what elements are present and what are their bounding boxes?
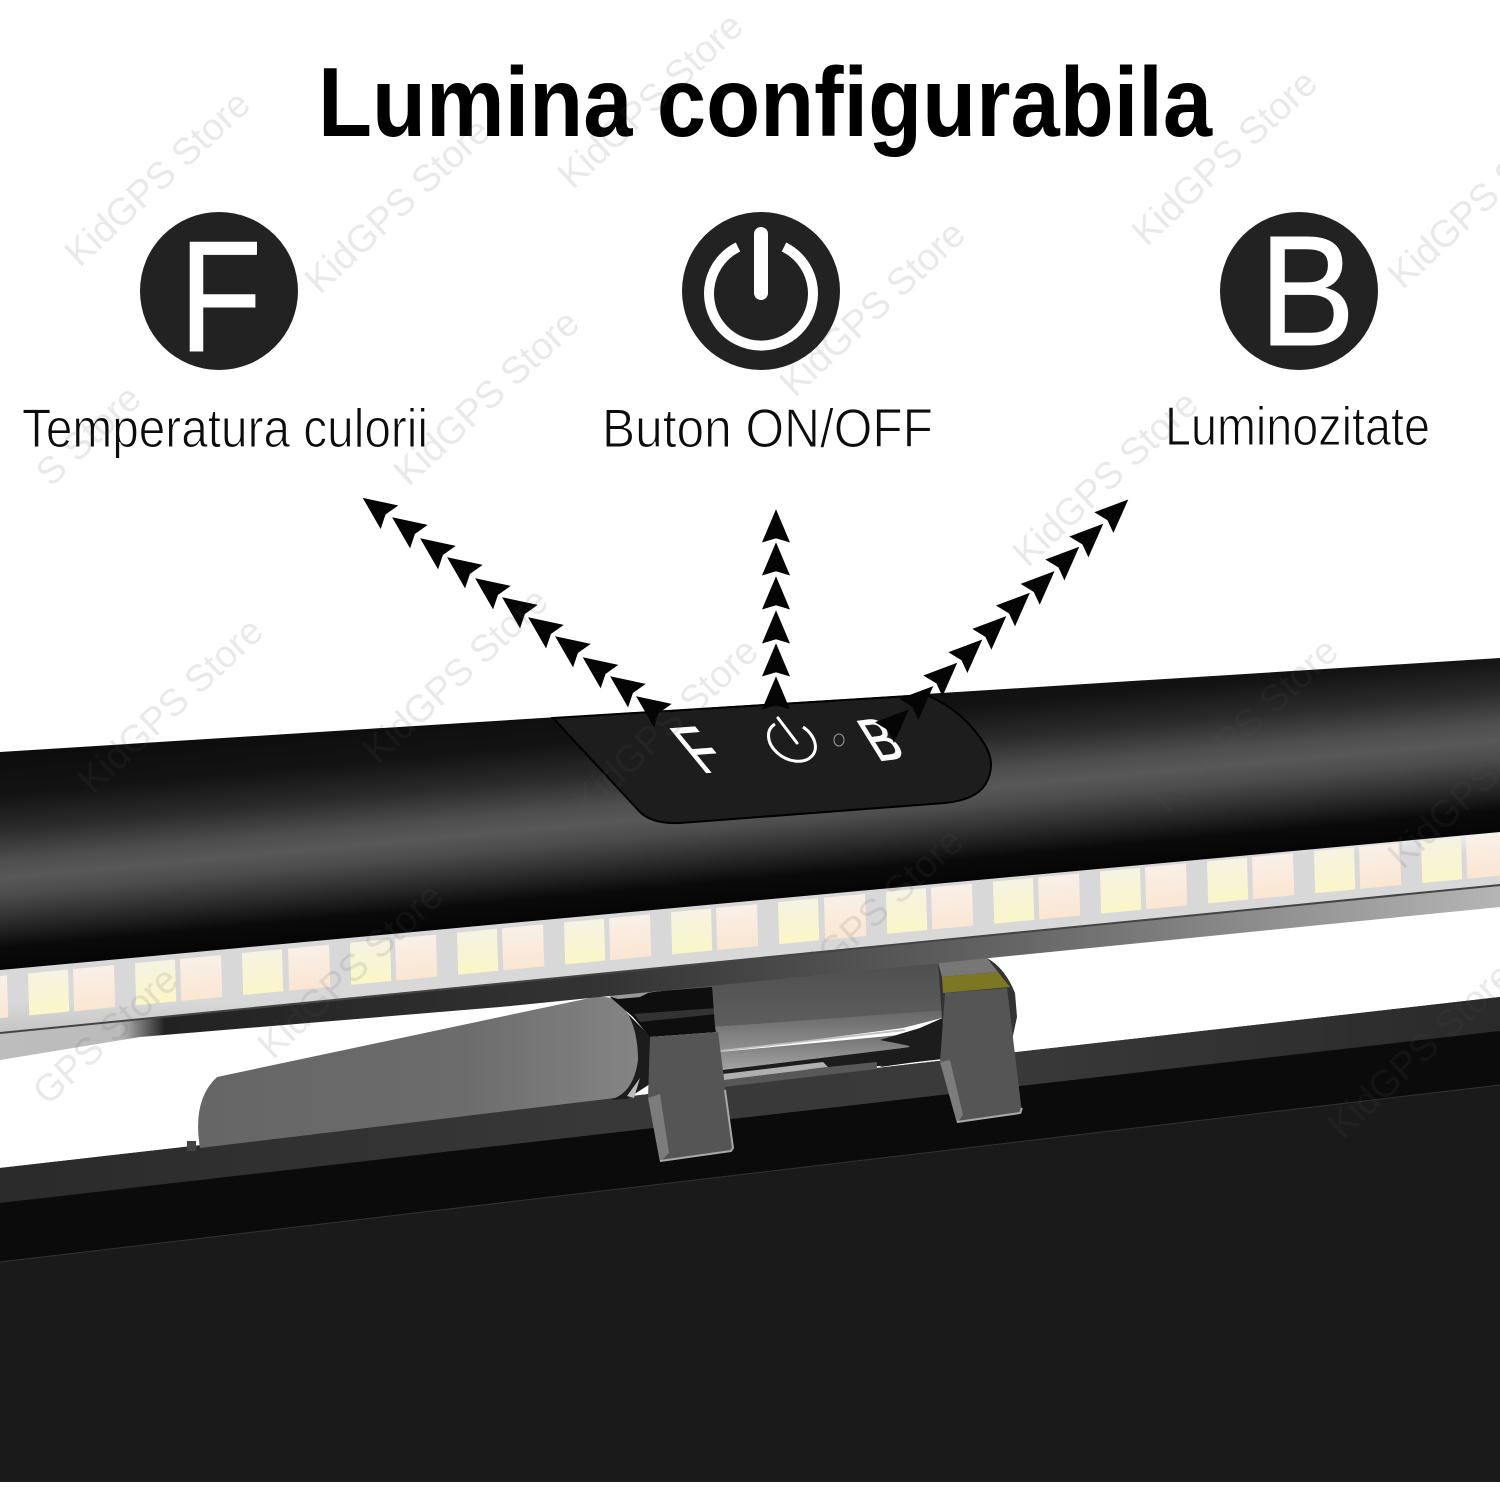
icon: B button: [1220, 202, 1378, 378]
mounting clip: [187, 958, 1022, 1162]
watermarks: KidGPS Store: [386, 302, 588, 494]
panel power symbol: [768, 718, 815, 761]
title: Lumina configurabila: [318, 47, 1213, 157]
label: Luminozitate: Luminozitate: [1165, 395, 1430, 457]
monitor: [0, 997, 1500, 1482]
cylinder dark line: [722, 1046, 952, 1074]
arrow: to Luminozitate: [876, 500, 1128, 742]
icon: B button: B: [1259, 202, 1355, 378]
watermarks: [25, 5, 1500, 1147]
cylinder top shade: [640, 975, 712, 992]
cylinder middle: [715, 1010, 946, 1052]
control panel: [553, 695, 991, 823]
watermarks: KidGPS Store: [1124, 62, 1326, 254]
cylinder upper: [712, 962, 946, 1027]
right clip: [940, 988, 1022, 1123]
left clip: [648, 1032, 733, 1162]
right clip edge: [957, 1108, 1022, 1122]
knob yellow band: [942, 972, 1010, 993]
watermarks: GPS Store: [25, 959, 187, 1113]
arrow: to Buton ON/OFF: [762, 510, 790, 709]
LEDs: [0, 833, 1500, 1021]
hub reflection: [634, 1008, 717, 1022]
watermarks: KidGPS Store: [355, 580, 557, 772]
label: Buton ON/OFF: Buton ON/OFF: [602, 397, 933, 459]
watermarks: KidGPS Store: [565, 630, 767, 822]
panel letter B: B: [846, 706, 916, 774]
hinge highlight: [627, 1078, 640, 1098]
icon: F button: F: [179, 209, 262, 385]
watermarks: KidGPS Store: [297, 110, 499, 302]
watermarks: KidGPS Store: [1145, 630, 1347, 822]
knob top light: [938, 958, 998, 977]
watermarks: KidGPS Store: [250, 875, 452, 1067]
hinge behind flap: [612, 998, 655, 1100]
white bottom margin: [0, 1482, 1500, 1500]
watermarks: KidGPS Store: [70, 610, 272, 802]
flap small tab: [187, 1141, 196, 1151]
panel letter F: F: [655, 713, 745, 787]
watermarks: S Store: [28, 377, 150, 495]
arrow: to Temperatura culorii: [363, 498, 671, 727]
cylinder light stripe: [723, 1062, 828, 1080]
left clip facet: [648, 1094, 669, 1162]
cylinder top highlight: [673, 958, 907, 982]
watermarks: KidGPS Store: [550, 5, 752, 197]
hub highlight: [608, 991, 652, 999]
left clip edge: [660, 1090, 733, 1161]
watermarks: KidGPS Store: [770, 820, 972, 1012]
icon: F button: [140, 209, 298, 385]
cylinder dark wedge: [880, 1016, 952, 1067]
lamp bar: [0, 658, 1500, 970]
LED strip: [0, 830, 1500, 1033]
cylinder grey stripe: [723, 1062, 877, 1087]
cylinder lower: [720, 1034, 910, 1070]
right clip facet: [940, 1060, 963, 1123]
panel LED dot: [834, 734, 844, 746]
watermarks: KidGPS Store: [772, 213, 974, 405]
right knob: [938, 958, 1017, 1060]
lower edge of LED strip: [0, 883, 1500, 1060]
label: Temperatura culorii: Temperatura culorii: [22, 397, 428, 459]
icon: power button: [682, 212, 840, 370]
cylinder light line: [720, 1030, 905, 1051]
hub dark: [610, 985, 718, 1037]
clip flap: [198, 997, 638, 1148]
watermarks: KidGPS Store: [1005, 383, 1207, 575]
watermarks: KidGPS Store: [57, 83, 259, 275]
